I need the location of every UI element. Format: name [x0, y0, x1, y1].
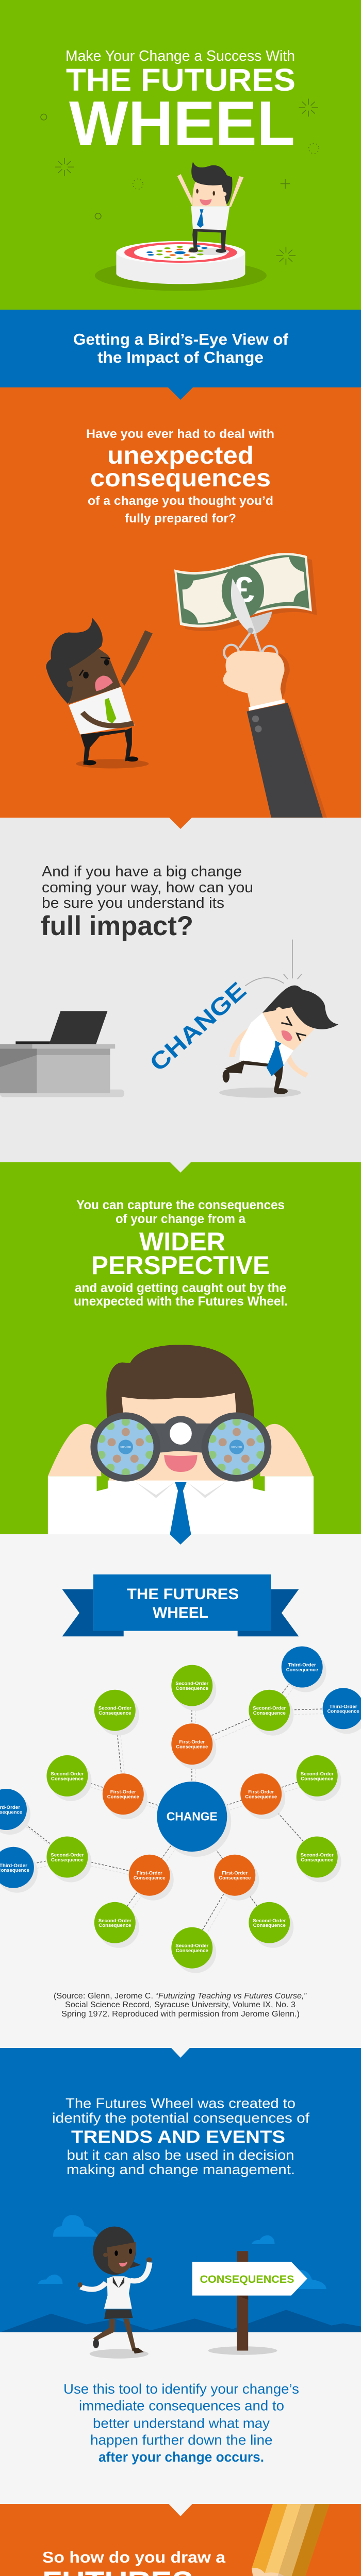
- node: first-order: [103, 1773, 147, 1819]
- trends text: but it can also be used in decision: [67, 2147, 294, 2163]
- node: second-order: [297, 1755, 341, 1801]
- node: third-order: [323, 1688, 361, 1734]
- question text: consequences: [90, 465, 271, 492]
- how-to heading: [42, 2548, 226, 2576]
- node: second-order: [249, 1902, 293, 1948]
- question text: [86, 427, 274, 526]
- tool text: immediate consequences and to: [79, 2398, 284, 2413]
- icon: woman walking to signpost: [78, 2227, 307, 2359]
- node: second-order: Consequence: [176, 1948, 208, 1954]
- how-to heading: So how do you draw a: [42, 2548, 226, 2566]
- node: third-order: [0, 1789, 30, 1835]
- tool text: happen further down the line: [90, 2432, 272, 2448]
- node: second-order: Consequence: [51, 1857, 84, 1863]
- panel: the futures wheel: [0, 1534, 361, 2048]
- node: first-order: Consequence: [245, 1794, 277, 1800]
- question text: be sure you understand its: [42, 895, 224, 911]
- node: second-order: Second-Order: [175, 1681, 209, 1687]
- node: second-order: [171, 1927, 216, 1973]
- trends text: making and change management.: [67, 2162, 295, 2177]
- icon: man with binoculars: CHANGE: [231, 1446, 242, 1449]
- node: second-order: Second-Order: [99, 1918, 132, 1924]
- node: first-order: First-Order: [222, 1871, 248, 1876]
- panel: full impact: [0, 818, 361, 1162]
- node: second-order: Second-Order: [51, 1771, 84, 1777]
- node: first-order: First-Order: [248, 1789, 274, 1795]
- node: second-order: Second-Order: [253, 1706, 286, 1711]
- icon: pencil and scribble: [110, 2504, 345, 2576]
- tool text: better understand what may: [93, 2415, 270, 2431]
- question text: [41, 863, 253, 941]
- icon: banknote: £: [233, 570, 254, 610]
- node: first-order: First-Order: [179, 1739, 205, 1745]
- icon: decorative sparkles: [41, 99, 319, 265]
- source note: (Source: Glenn, Jerome C. “ Futurizing Teaching vs Futures Course, ”: [54, 1992, 307, 2001]
- node: first-order: Consequence: [134, 1875, 166, 1881]
- banner heading: the Impact of Change: [97, 348, 264, 366]
- node: first-order: First-Order: [110, 1789, 136, 1795]
- node: third-order: [282, 1647, 326, 1692]
- ribbon heading: [62, 1574, 299, 1636]
- node: second-order: [94, 1690, 139, 1736]
- banner heading: Getting a Bird’s-Eye View of: [73, 330, 289, 348]
- node: second-order: [297, 1836, 341, 1883]
- perspective text: PERSPECTIVE: [91, 1251, 270, 1280]
- node: first-order: [214, 1855, 259, 1901]
- icon: man with binoculars: [48, 1345, 314, 1545]
- source note: Social Science Record, Syracuse University, Volume IX, No. 3: [65, 2001, 296, 2009]
- panel: how to draw: [0, 2504, 361, 2576]
- node: second-order: Consequence: [301, 1857, 333, 1863]
- icon: banknote: [174, 553, 317, 631]
- node: first-order: [171, 1723, 216, 1769]
- sign label: CONSEQUENCES: [200, 2274, 294, 2285]
- icon: happy man: [177, 162, 243, 253]
- question text: unexpected: [107, 442, 254, 469]
- perspective text: unexpected with the Futures Wheel.: [74, 1294, 288, 1309]
- perspective text: [74, 1198, 288, 1309]
- node: second-order: [46, 1755, 91, 1801]
- panel: bird's-eye view banner: [0, 310, 361, 387]
- node: first-order: [129, 1855, 174, 1901]
- trends text: [52, 2096, 310, 2177]
- trends text: The Futures Wheel was created to: [65, 2096, 296, 2111]
- perspective text: of your change from a: [116, 1212, 246, 1226]
- pointer arrow: [170, 1162, 191, 1173]
- icon: scissors: [224, 579, 277, 662]
- node: second-order: [249, 1690, 293, 1736]
- source note: [54, 1992, 307, 2019]
- icon: clouds and mountains: [0, 2215, 361, 2332]
- node: second-order: Second-Order: [301, 1771, 334, 1777]
- question text: of a change you thought you’d: [88, 494, 273, 508]
- question text: Have you ever had to deal with: [86, 427, 274, 441]
- source note: Spring 1972. Reproduced with permission from Jerome Glenn.): [61, 2010, 300, 2019]
- tool text: after your change occurs.: [99, 2449, 264, 2465]
- node: third-order: Consequence: [327, 1709, 359, 1715]
- node: second-order: [94, 1902, 139, 1948]
- question text: fully prepared for?: [125, 512, 236, 526]
- node: second-order: Second-Order: [253, 1918, 286, 1924]
- node: second-order: [171, 1665, 216, 1711]
- node: first-order: First-Order: [137, 1871, 162, 1876]
- tool text: Use this tool to identify your change’s: [63, 2381, 299, 2397]
- panel: wider perspective: [0, 1162, 361, 1534]
- panel: unexpected consequences: [0, 387, 361, 818]
- node: second-order: Second-Order: [175, 1943, 209, 1949]
- perspective text: You can capture the consequences: [76, 1198, 285, 1212]
- trends text: TRENDS AND EVENTS: [71, 2127, 285, 2147]
- icon: platform with wheel: [95, 241, 267, 291]
- icon: impact marks: [245, 940, 302, 986]
- trends text: identify the potential consequences of: [52, 2110, 310, 2126]
- icon: running man: [219, 986, 338, 1098]
- question text: full impact?: [41, 911, 193, 941]
- ribbon heading: WHEEL: [153, 1604, 208, 1621]
- node: second-order: Consequence: [99, 1710, 131, 1716]
- node: third-order: Third-Order: [288, 1662, 316, 1668]
- question text: And if you have a big change: [42, 863, 242, 880]
- node: third-order: [0, 1847, 38, 1893]
- pointer arrow: [169, 2504, 192, 2516]
- panel: trends and events: [0, 2048, 361, 2332]
- node: first-order: Consequence: [107, 1794, 139, 1800]
- pointer arrow: [168, 387, 193, 400]
- title: THE FUTURES: [66, 62, 296, 97]
- node: second-order: Consequence: [253, 1923, 286, 1928]
- panel: hero: [0, 0, 361, 310]
- node: second-order: Consequence: [253, 1710, 286, 1716]
- subtitle: Make Your Change a Success With: [65, 48, 295, 64]
- perspective text: WIDER: [139, 1227, 225, 1256]
- banner heading: [73, 330, 289, 366]
- node: second-order: Consequence: [301, 1776, 333, 1782]
- icon: hand and sleeve: [223, 651, 327, 818]
- node: second-order: Consequence: [176, 1686, 208, 1691]
- pointer arrow: [169, 818, 192, 829]
- node: second-order: Consequence: [51, 1776, 84, 1782]
- sign: consequences: [192, 2262, 307, 2296]
- node: first-order: Consequence: [176, 1744, 208, 1750]
- ribbon heading: THE FUTURES: [127, 1586, 239, 1603]
- icon: man with binoculars: CHANGE: [120, 1446, 131, 1449]
- node: second-order: Second-Order: [99, 1706, 132, 1711]
- node: change centre: [157, 1782, 231, 1857]
- node: first-order: Consequence: [219, 1875, 251, 1881]
- node: third-order: Third-Order: [0, 1863, 27, 1869]
- pointer arrow: [171, 2048, 190, 2058]
- node: third-order: Consequence: [286, 1667, 318, 1673]
- question text: coming your way, how can you: [42, 879, 253, 896]
- node: second-order: Second-Order: [301, 1853, 334, 1858]
- tool text: [63, 2381, 299, 2465]
- perspective text: and avoid getting caught out by the: [75, 1281, 286, 1295]
- node: change centre: CHANGE: [167, 1810, 218, 1823]
- icon: desk and laptop: [0, 1011, 124, 1097]
- node: third-order: Third-Order: [330, 1704, 357, 1709]
- title: WHEEL: [69, 88, 295, 158]
- node: second-order: Second-Order: [51, 1853, 84, 1858]
- icon: upset man: [46, 618, 153, 769]
- node: second-order: Consequence: [99, 1923, 131, 1928]
- node: second-order: [46, 1836, 91, 1883]
- chart: futures wheel diagram: [0, 1647, 361, 1973]
- label: change arrow text: CHANGE: [144, 977, 251, 1076]
- node: first-order: [240, 1773, 285, 1819]
- panel: use this tool: [0, 2332, 361, 2504]
